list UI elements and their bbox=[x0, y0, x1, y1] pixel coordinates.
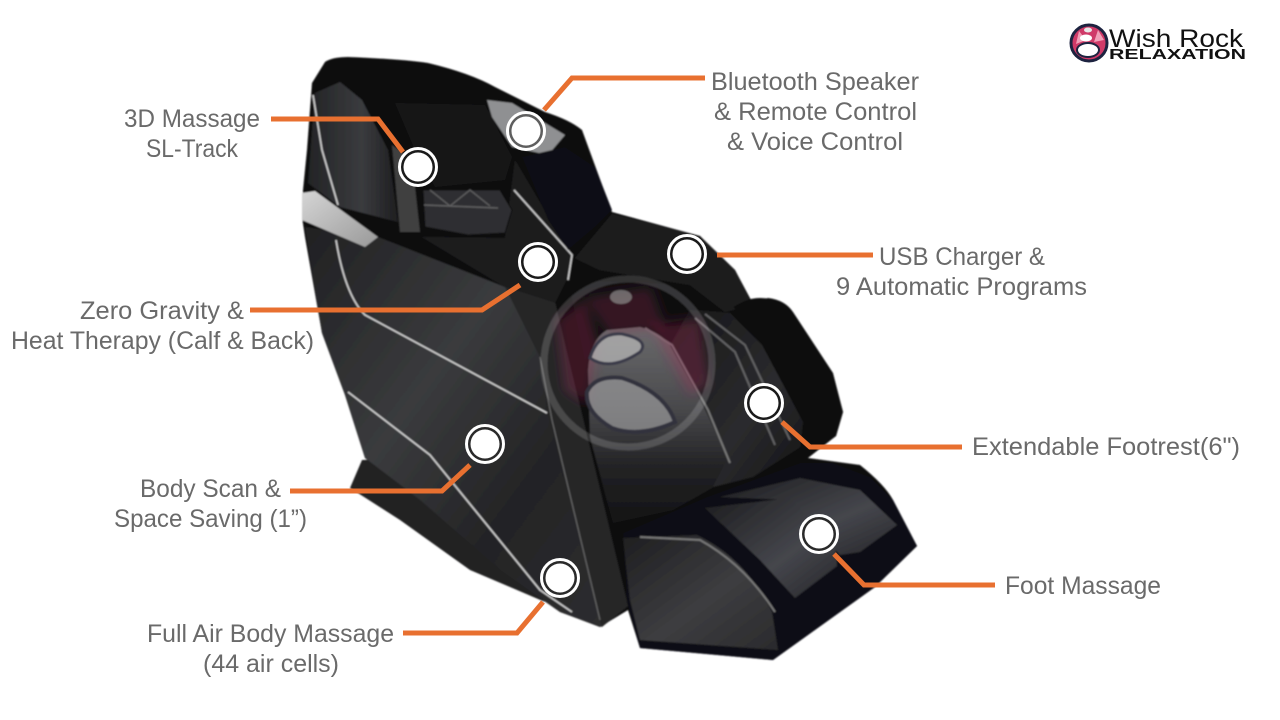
label: Full Air Body Massage bbox=[147, 620, 394, 648]
front strip of shell bbox=[505, 287, 628, 627]
silver speaker panel bbox=[487, 100, 565, 155]
marker bbox=[668, 236, 706, 272]
marker bbox=[520, 244, 556, 280]
label: 3D Massage bbox=[124, 105, 260, 133]
label: Zero Gravity & bbox=[80, 297, 244, 325]
callout: Bluetooth Speaker bbox=[508, 68, 919, 156]
headrest inner seam bbox=[392, 145, 420, 232]
leader line bbox=[271, 119, 403, 152]
foot well right bbox=[720, 478, 897, 555]
callout: Extendable Footrest bbox=[746, 384, 1240, 461]
marker bbox=[400, 148, 436, 186]
label bbox=[711, 68, 919, 156]
marker bbox=[466, 426, 504, 462]
silver trim lines bbox=[313, 95, 572, 612]
label: & Voice Control bbox=[727, 128, 903, 156]
leader line bbox=[544, 78, 705, 110]
callout: Body Scan bbox=[114, 426, 504, 533]
mesh seat shadow bbox=[568, 280, 725, 360]
leader line bbox=[290, 465, 470, 491]
callout: Zero Gravity bbox=[11, 244, 556, 355]
label bbox=[836, 243, 1087, 301]
watermark bbox=[544, 279, 712, 447]
left calf rest bbox=[588, 327, 728, 523]
label bbox=[114, 475, 307, 533]
marker bbox=[542, 560, 578, 596]
label: Space Saving (1”) bbox=[114, 505, 307, 533]
marker bbox=[508, 112, 544, 150]
quilted lumbar pad bbox=[423, 190, 512, 235]
leader line bbox=[403, 602, 543, 633]
headrest side panel bbox=[308, 82, 398, 222]
chair silhouette bbox=[302, 57, 917, 660]
headrest pillow bbox=[395, 103, 512, 187]
chair base bbox=[350, 459, 545, 602]
label bbox=[124, 105, 260, 163]
middle calf rest bbox=[670, 310, 803, 487]
leader line bbox=[250, 285, 520, 310]
logo: Wish Rock Relaxation bbox=[1071, 25, 1246, 63]
label: Body Scan & bbox=[140, 475, 281, 503]
label bbox=[11, 297, 314, 355]
callout: Foot Massage bbox=[800, 516, 1161, 600]
silver handle bbox=[302, 191, 378, 247]
label: (44 air cells) bbox=[203, 650, 339, 678]
centre back panel bbox=[422, 160, 572, 303]
leader line bbox=[834, 554, 995, 585]
footrest bbox=[623, 463, 917, 660]
callout: 3D Massage SL-Track bbox=[124, 105, 436, 186]
label: USB Charger & bbox=[879, 243, 1045, 271]
label: Heat Therapy (Calf & Back) bbox=[11, 327, 314, 355]
foot side panel bbox=[623, 535, 778, 650]
lower back side panel bbox=[305, 227, 602, 627]
label: Foot Massage bbox=[1005, 572, 1161, 600]
label: SL-Track bbox=[146, 135, 238, 163]
right calf rest bbox=[733, 298, 843, 456]
logo emblem bbox=[1071, 25, 1107, 61]
label: Bluetooth Speaker bbox=[711, 68, 919, 96]
seam on shell front bbox=[540, 357, 600, 620]
logo wordmark: Wish Rock bbox=[1109, 25, 1244, 53]
armrest right inner bbox=[522, 147, 612, 250]
massage chair bbox=[302, 57, 917, 660]
callout: Full Air Body Massage bbox=[147, 560, 578, 678]
callout: USB Charger bbox=[668, 236, 1087, 301]
leader line bbox=[717, 252, 873, 258]
logo tagline: RELAXATION bbox=[1109, 46, 1246, 63]
leader line bbox=[782, 422, 962, 447]
control panel arm bbox=[575, 214, 752, 312]
marker bbox=[746, 384, 782, 422]
label: & Remote Control bbox=[714, 98, 917, 126]
label: Extendable Footrest(6") bbox=[972, 433, 1240, 461]
foot well left bbox=[705, 498, 837, 598]
label: 9 Automatic Programs bbox=[836, 273, 1087, 301]
label bbox=[147, 620, 394, 678]
marker bbox=[800, 516, 838, 552]
